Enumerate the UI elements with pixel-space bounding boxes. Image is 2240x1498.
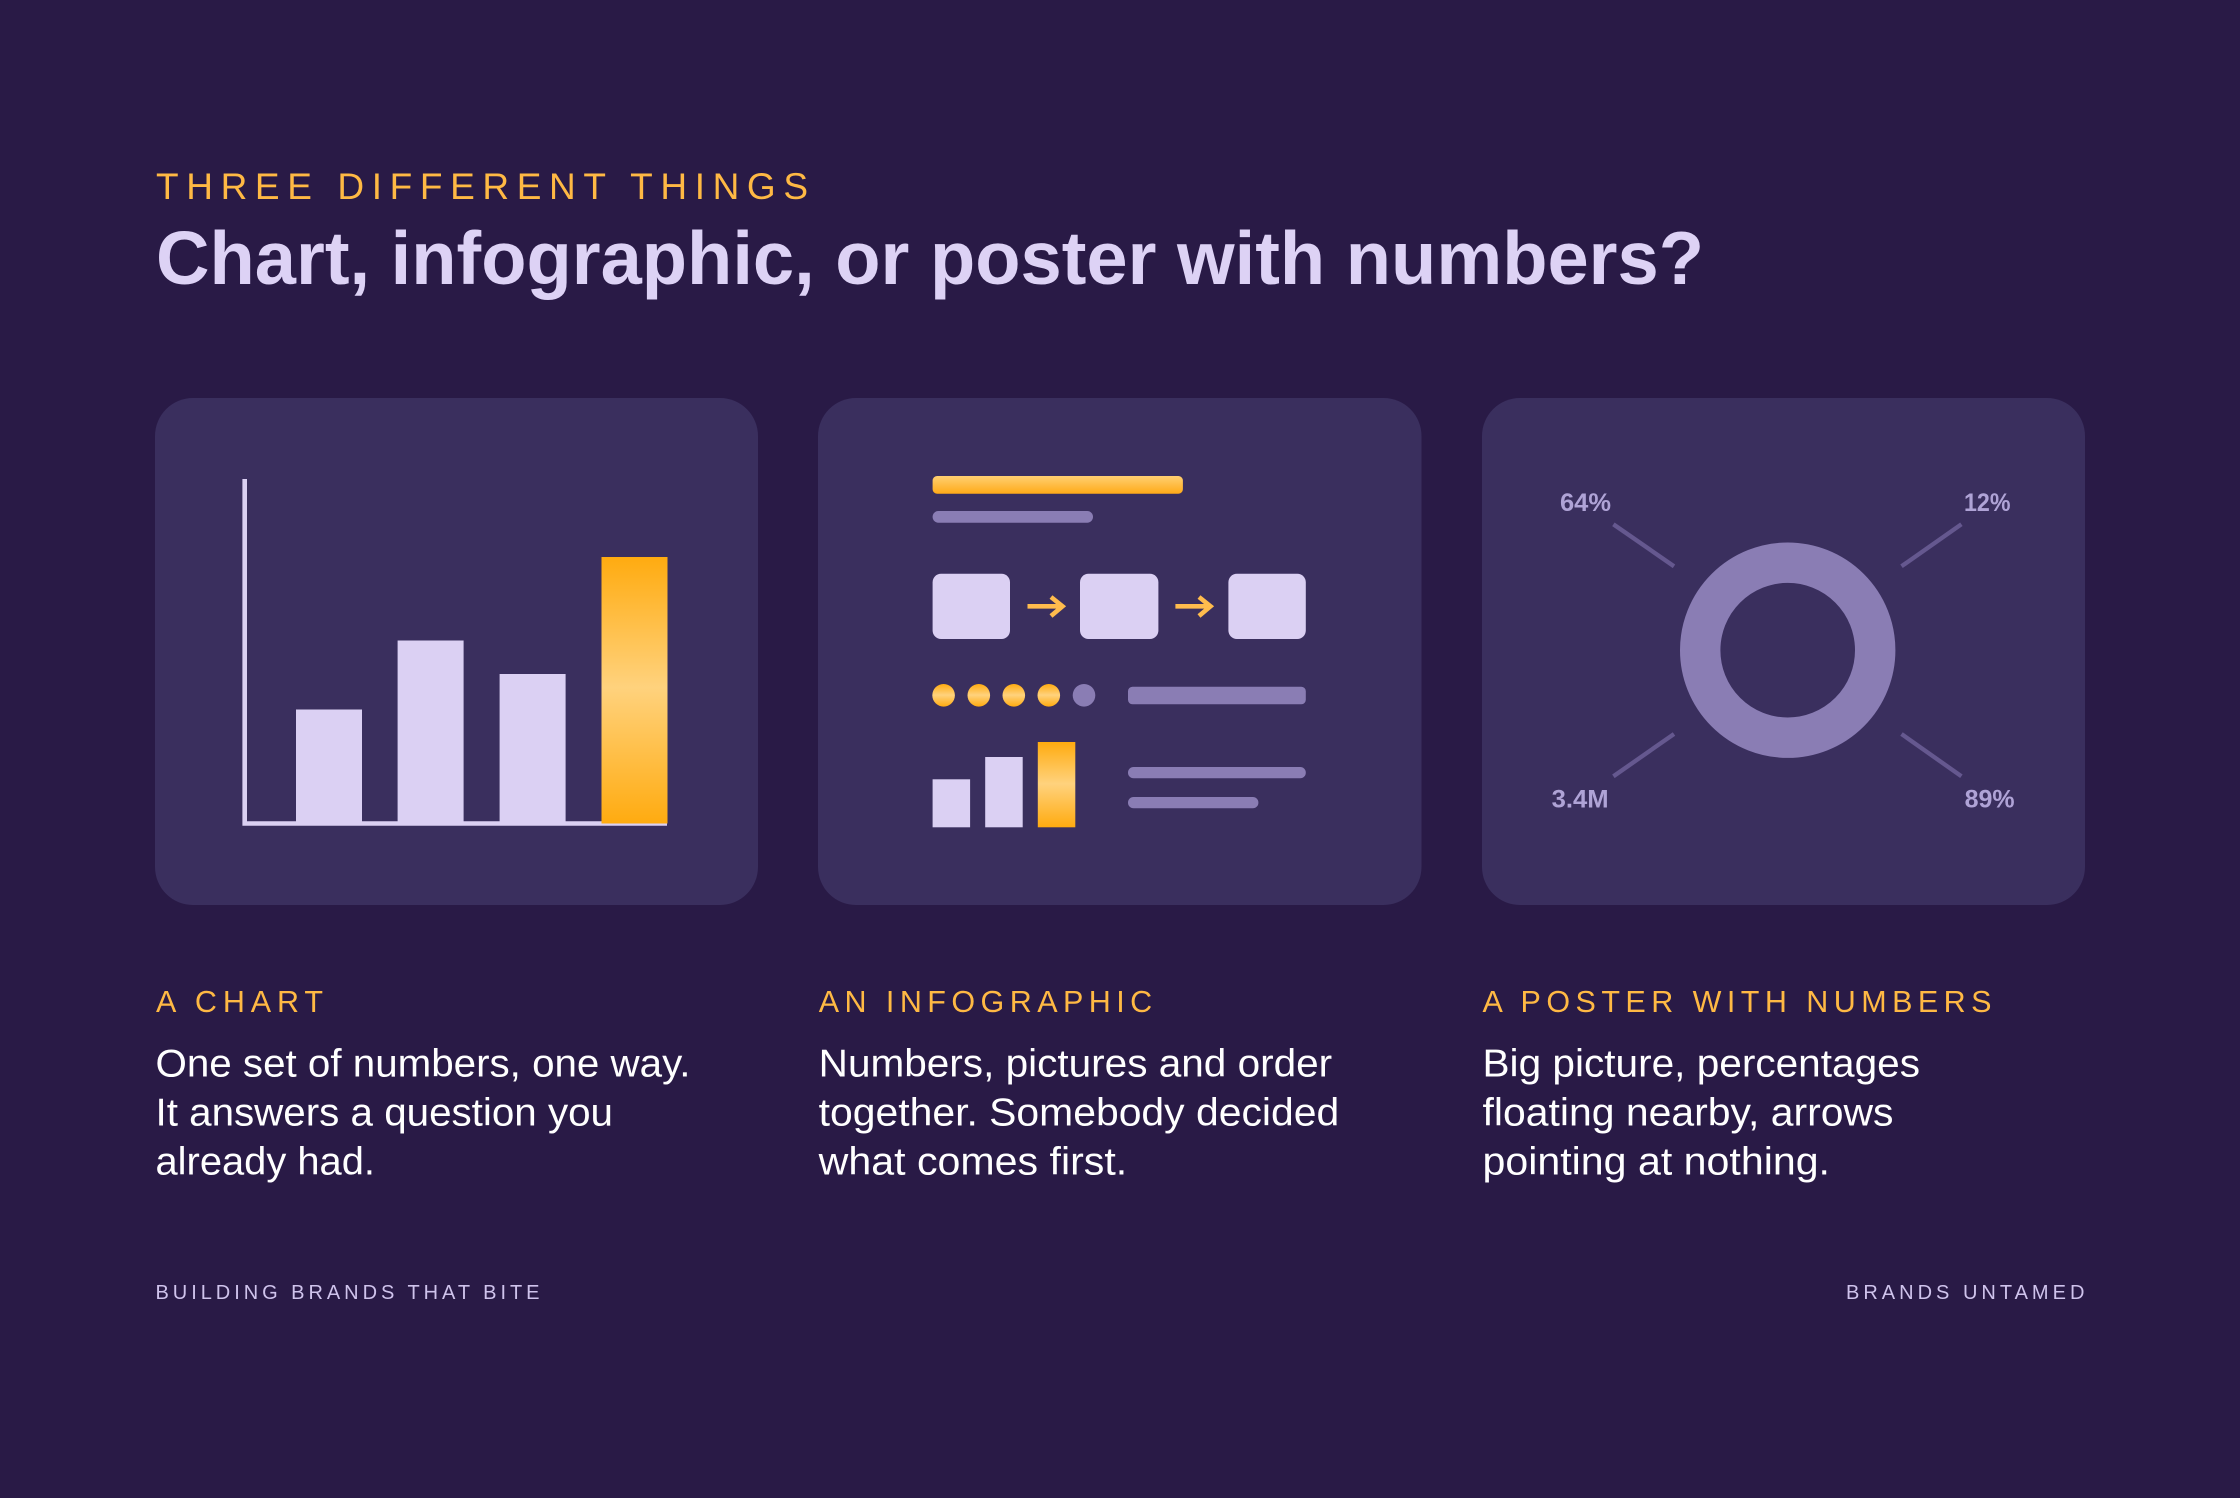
caption body: Big picture, percentages xyxy=(1482,1043,1920,1086)
caption body xyxy=(156,1043,690,1183)
stat: 12%: 12% xyxy=(1964,489,2010,517)
highlighted bar xyxy=(602,557,668,824)
flow diagram xyxy=(933,574,1306,639)
caption body: pointing at nothing. xyxy=(1482,1140,1830,1183)
caption body xyxy=(1482,1043,1920,1183)
flow box 3 xyxy=(1228,574,1306,639)
chart axes xyxy=(245,479,667,824)
eyebrow heading: THREE DIFFERENT THINGS xyxy=(156,166,808,207)
stat: 64%: 64% xyxy=(1560,489,1611,517)
caption body: Numbers, pictures and order xyxy=(819,1043,1332,1086)
footer left: BUILDING BRANDS THAT BITE xyxy=(156,1282,540,1304)
stat: 3.4M: 3.4M xyxy=(1552,786,1609,814)
pointer lines xyxy=(1613,524,1961,776)
caption body: floating nearby, arrows xyxy=(1482,1091,1894,1134)
bar 2 xyxy=(398,640,464,826)
subhead bar xyxy=(933,511,1093,523)
panel: infographic card xyxy=(818,398,1422,905)
caption heading: A POSTER WITH NUMBERS xyxy=(1482,985,1992,1019)
title: Chart, infographic, or poster with numbers? xyxy=(156,216,1704,300)
text line bars xyxy=(1128,767,1306,808)
bar 3 xyxy=(500,674,566,826)
caption body: together. Somebody decided xyxy=(819,1091,1339,1134)
caption heading: A CHART xyxy=(156,985,323,1019)
flow box 2 xyxy=(1080,574,1158,639)
caption body: already had. xyxy=(156,1140,375,1183)
donut ring xyxy=(1700,563,1875,738)
arrow 2 xyxy=(1175,597,1210,616)
bar chart xyxy=(245,479,667,826)
mini bar chart xyxy=(933,742,1075,827)
caption: an infographic xyxy=(818,985,1339,1183)
caption: a chart xyxy=(156,985,690,1183)
rating text bar xyxy=(1128,687,1306,704)
caption body: One set of numbers, one way. xyxy=(156,1043,690,1086)
panel: chart card xyxy=(155,398,758,905)
flow box 1 xyxy=(933,574,1010,639)
stat: 89%: 89% xyxy=(1965,786,2015,814)
headline bar xyxy=(933,476,1183,494)
caption body xyxy=(818,1043,1339,1183)
caption body: what comes first. xyxy=(818,1140,1127,1183)
caption body: It answers a question you xyxy=(156,1091,613,1134)
bar 1 xyxy=(296,710,362,826)
rating dots xyxy=(932,684,1095,707)
caption heading: AN INFOGRAPHIC xyxy=(819,985,1152,1019)
footer right: BRANDS UNTAMED xyxy=(1846,1282,2084,1304)
panel: poster card xyxy=(1482,398,2085,905)
caption: a poster with numbers xyxy=(1482,985,1992,1183)
arrow 1 xyxy=(1028,597,1062,616)
